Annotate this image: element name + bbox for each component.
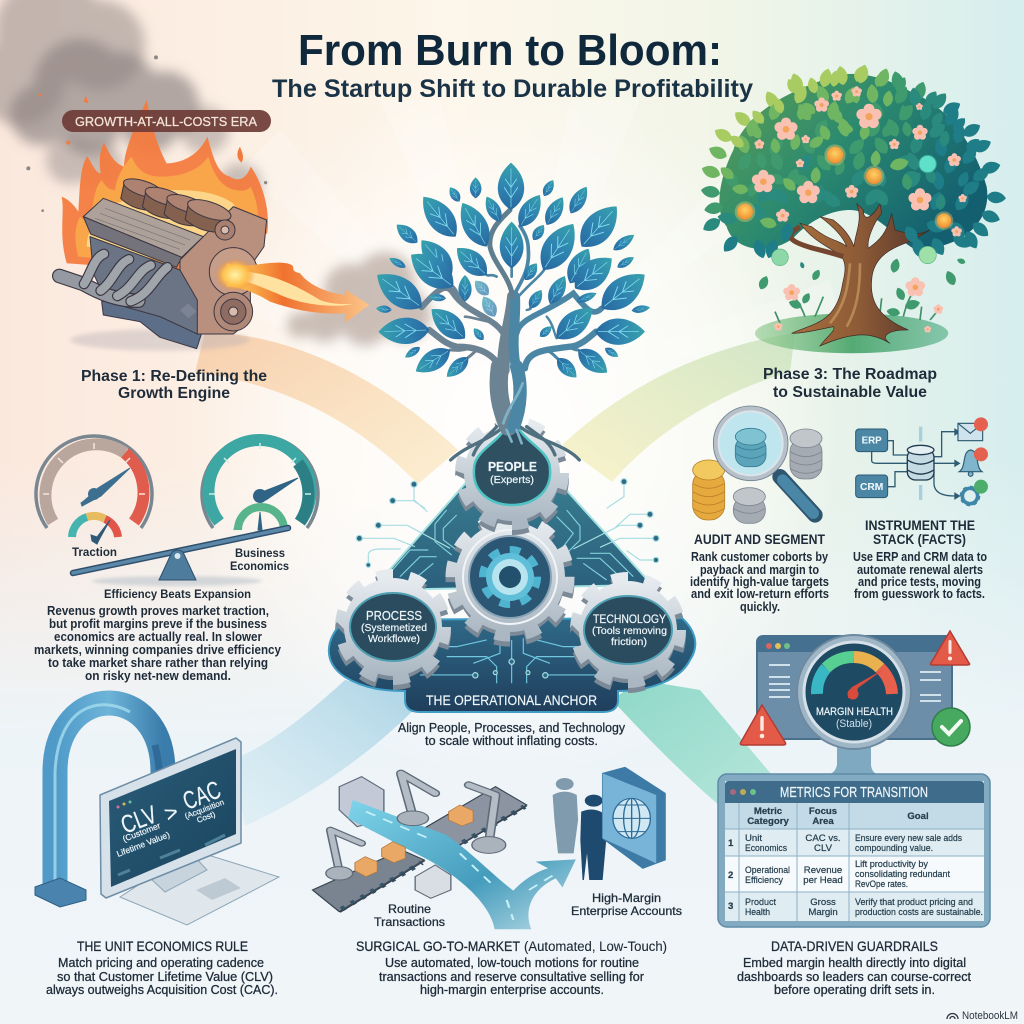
- ribbon: blue lower left: [232, 680, 428, 826]
- table row 2: per Head: [803, 875, 843, 886]
- text: instrument the stack: Use ERP and CRM data to: [853, 550, 987, 564]
- text: audit and segment: Rank customer coborts by: [691, 550, 828, 564]
- table row 1: Economics: [745, 843, 787, 854]
- table row 1: Ensure every new sale adds: [855, 833, 962, 844]
- monitor text: CAC: [179, 776, 225, 816]
- gear: technology: [577, 579, 679, 686]
- text: surgical go-to-market: high-margin enterprise accounts.: [420, 983, 604, 997]
- table row 3: 3: [728, 901, 733, 912]
- table row 3: Margin: [808, 907, 838, 918]
- gauge labels: Traction: [72, 545, 117, 559]
- table row 1: CLV: [814, 843, 833, 854]
- ERP box: ERP: [862, 436, 882, 447]
- monitor: [100, 738, 241, 898]
- table row 1: compounding value.: [855, 843, 933, 854]
- operational anchor: triangle of gears: [329, 423, 695, 712]
- table header row: Category: [747, 816, 789, 827]
- connector neck: [826, 745, 880, 775]
- gear labels: (Experts): [490, 474, 534, 486]
- gear: people: [462, 423, 562, 528]
- warning: right: [930, 631, 970, 665]
- arrow: exhaust flame into tree: [215, 258, 369, 323]
- text: instrument the stack: INSTRUMENT THE: [865, 518, 975, 533]
- table row 2: Efficiency: [745, 875, 783, 886]
- tree leaves: [369, 163, 653, 382]
- table header row: Metric: [754, 806, 783, 817]
- robot arms: [326, 773, 506, 880]
- text: efficiency beats expansion: Efficiency Beats Expansion: [104, 587, 251, 601]
- text: data-driven guardrails: before operating drift sets in.: [774, 983, 935, 997]
- table row 2: RevOpe rates.: [855, 879, 908, 890]
- table header row: Goal: [907, 811, 929, 822]
- plants: [774, 277, 943, 333]
- fruits and blossoms: [735, 86, 967, 266]
- gauge: traction: [36, 436, 152, 544]
- triangle backdrop: [372, 430, 652, 590]
- text: surgical go-to-market: (Automated, Low-Touch): [524, 939, 667, 954]
- text: surgical go-to-market: SURGICAL GO-TO-MARKET: [356, 939, 520, 954]
- text: surgical go-to-market: transactions and reserve consultative selling for: [379, 970, 644, 984]
- monitor text: (Acquisition: [183, 798, 225, 821]
- table row 3: Gross: [810, 897, 836, 908]
- crown mass: [719, 74, 987, 250]
- coin stack: gray right: [790, 429, 822, 479]
- icon: automated conveyor and enterprise split: [312, 767, 665, 929]
- holographic globe panel: [603, 767, 665, 868]
- gauge labels: Business: [235, 546, 285, 560]
- flow dashes: [366, 812, 554, 920]
- trunk: [791, 203, 930, 346]
- status check: [932, 708, 970, 746]
- heading: phase 1: Phase 1: Re-Defining the: [81, 368, 267, 385]
- heading: phase 1: Growth Engine: [118, 385, 230, 402]
- table row 2: Operational: [745, 865, 790, 876]
- table row 3: production costs are sustainable.: [855, 907, 983, 918]
- parcels: [355, 805, 473, 877]
- table: metrics for transition: METRICS FOR TRANSITION: [780, 785, 928, 801]
- heading: phase 1: [81, 368, 267, 402]
- silhouette: colleague: [553, 778, 578, 853]
- text: audit and segment: identify high-value targets: [690, 575, 829, 589]
- ground: [755, 313, 948, 353]
- text: data-driven guardrails: dashboards so leaders can course-correct: [737, 970, 972, 984]
- gauges and seesaw: [36, 436, 318, 586]
- margin gauge: MARGIN HEALTH: [816, 706, 893, 718]
- icon: burning engine: [59, 175, 267, 351]
- text: audit and segment: AUDIT AND SEGMENT: [694, 532, 826, 547]
- table row 1: [728, 833, 962, 854]
- gear labels: Workflowe): [368, 633, 420, 645]
- coin stack: gray lower: [733, 488, 765, 523]
- monitor text: >: [161, 799, 182, 827]
- heading: phase 3: Phase 3: The Roadmap: [763, 366, 937, 383]
- table row 2: 2: [728, 870, 733, 881]
- text: unit economics rule: [46, 939, 278, 997]
- seesaw beam: [73, 528, 288, 573]
- gear labels: PEOPLE: [488, 459, 537, 474]
- table row 3: Verify that product pricing and: [855, 897, 973, 908]
- monitor text: Cost): [195, 809, 217, 825]
- text: audit and segment: [690, 532, 829, 614]
- bell alert: [959, 447, 988, 476]
- CRM box: CRM: [860, 482, 883, 493]
- leaf clusters: [700, 63, 1006, 260]
- text: surgical go-to-market: Use automated, low-touch motions for routine: [385, 956, 639, 970]
- icon: margin health dashboard: [740, 631, 970, 775]
- monitor stand: [150, 857, 207, 892]
- text: efficiency beats expansion: [34, 587, 281, 683]
- gauge labels: Economics: [230, 559, 289, 573]
- margin gauge: (Stable): [836, 718, 872, 730]
- table row 1: Unit: [745, 833, 762, 844]
- heading: phase 3: to Sustainable Value: [773, 384, 927, 401]
- circuit traces: [356, 479, 659, 683]
- text: unit economics rule: Match pricing and operating cadence: [58, 956, 264, 970]
- text: efficiency beats expansion: Revenus growth proves market traction,: [47, 604, 269, 618]
- flames behind engine: [26, 55, 268, 273]
- label: routine transactions: [374, 902, 445, 929]
- table row 2: Revenue: [804, 865, 842, 876]
- exhaust manifold: [59, 254, 167, 301]
- text: unit economics rule: THE UNIT ECONOMICS RULE: [77, 939, 248, 954]
- text: instrument the stack: automate renewal alerts: [857, 563, 983, 577]
- label: routine transactions: Transactions: [374, 915, 445, 929]
- table row 1: 1: [728, 838, 734, 849]
- silhouette: account executive: [580, 795, 625, 880]
- falling leaves: [757, 257, 966, 291]
- gauge labels: [72, 545, 289, 573]
- text: efficiency beats expansion: on risky net-new demand.: [85, 669, 231, 683]
- ribbon: teal lower right: [612, 680, 772, 806]
- text: unit economics rule: so that Customer Lifetime Value (CLV): [57, 970, 273, 984]
- text: instrument the stack: and price tests, moving: [858, 575, 981, 589]
- upper conveyor: [424, 787, 527, 850]
- table: metrics for transition: [718, 774, 990, 927]
- text: surgical go-to-market: [356, 939, 667, 997]
- title: The Startup Shift to Durable Profitability: [272, 75, 753, 103]
- seesaw fulcrum: [159, 550, 196, 580]
- table header row: Area: [812, 816, 834, 827]
- coin stack: gold: [693, 460, 725, 520]
- text: data-driven guardrails: Embed margin health directly into digital: [743, 956, 966, 970]
- table header row: [747, 806, 929, 827]
- monitor text: Lifetime Value): [115, 829, 171, 859]
- text: efficiency beats expansion: to take market share rather than relying: [48, 656, 268, 670]
- magnifier: [713, 406, 815, 515]
- text: instrument the stack: STACK (FACTS): [873, 532, 966, 547]
- table row 3: Health: [745, 907, 770, 918]
- dashboard window: [757, 636, 952, 739]
- table row 2: [728, 859, 950, 890]
- label: high-margin enterprise accounts: Enterprise Accounts: [571, 904, 682, 918]
- icon: blue central tree: [369, 163, 653, 460]
- intake machine: [339, 777, 384, 827]
- monitor text: [115, 776, 225, 875]
- tree branches and roots: [422, 210, 602, 460]
- gear: process: [342, 576, 444, 683]
- label: high-margin enterprise accounts: High-Margin: [592, 891, 661, 905]
- text: audit and segment: quickly.: [740, 600, 780, 614]
- pill: growth-at-all-costs era: [62, 110, 271, 132]
- table row 1: CAC vs.: [805, 833, 841, 844]
- warning: left: [740, 705, 786, 745]
- table row 2: consolidating redundant: [855, 869, 950, 880]
- database: [907, 445, 934, 480]
- watermark: NotebookLM: NotebookLM: [962, 1010, 1018, 1022]
- gear labels: PROCESS: [366, 609, 422, 623]
- laptop base: [120, 850, 279, 925]
- text: align people, processes, technology: [398, 721, 626, 748]
- text: data-driven guardrails: DATA-DRIVEN GUARDRAILS: [771, 939, 938, 954]
- text: unit economics rule: always outweighs Acquisition Cost (CAC).: [46, 983, 278, 997]
- ribbon: green bloom path: [562, 333, 795, 482]
- gear labels: (Tools removing: [592, 625, 667, 637]
- icon: coins and magnifier: [693, 406, 822, 523]
- icon: data stack diagram: [856, 417, 988, 504]
- text: efficiency beats expansion: but profit margins preve if the business: [49, 617, 267, 631]
- gear labels: [361, 459, 667, 708]
- arch: [35, 703, 163, 907]
- gear labels: THE OPERATIONAL ANCHOR: [426, 692, 597, 708]
- envelope alert: [958, 417, 988, 441]
- title: From Burn to Bloom:: [298, 26, 722, 75]
- air filter stack: [117, 175, 233, 237]
- gear check: [962, 480, 988, 504]
- text: align people, processes, technology: Align People, Processes, and Technology: [398, 721, 626, 735]
- icon: blooming tree: [700, 63, 1006, 353]
- text: efficiency beats expansion: markets, winning companies drive efficiency: [34, 643, 281, 657]
- text: audit and segment: payback and margin to: [700, 563, 819, 577]
- text: audit and segment: and exit low-return efforts: [691, 587, 829, 601]
- gauge: business economics: [202, 436, 318, 530]
- heading: phase 3: [763, 366, 937, 401]
- split flow arrow: [348, 800, 576, 929]
- margin gauge: [797, 635, 911, 749]
- title: [272, 26, 753, 103]
- gear labels: (Systemetized: [361, 622, 427, 634]
- table row 3: Product: [745, 897, 776, 908]
- pill: growth-at-all-costs era: GROWTH-AT-ALL-COSTS ERA: [75, 114, 257, 129]
- monitor text: (Customer: [121, 820, 162, 844]
- gear labels: TECHNOLOGY: [593, 612, 666, 626]
- lower conveyor: [312, 850, 425, 912]
- text: align people, processes, technology: to scale without inflating costs.: [425, 734, 598, 748]
- text: efficiency beats expansion: economics are actually real. In slower: [54, 630, 262, 644]
- table header row: Focus: [809, 806, 837, 817]
- gear labels: friction): [611, 636, 647, 648]
- gear: center hub: [453, 520, 567, 639]
- scanner: [415, 865, 451, 898]
- table row 2: Lift productivity by: [855, 859, 928, 870]
- exhaust smoke cloud toward tree: [287, 252, 431, 346]
- label: high-margin enterprise accounts: [571, 891, 682, 918]
- monitor text: CLV: [117, 800, 161, 840]
- table row 3: [728, 897, 983, 918]
- icon: arch and CLV monitor: [35, 703, 279, 925]
- text: instrument the stack: [853, 518, 987, 601]
- label: routine transactions: Routine: [388, 902, 431, 916]
- text: data-driven guardrails: [737, 939, 972, 997]
- anchor base: [329, 618, 695, 712]
- ribbon: orange burn path: [195, 332, 458, 484]
- text: instrument the stack: from guesswork to facts.: [854, 587, 985, 601]
- smoke cloud top left: [0, 0, 262, 207]
